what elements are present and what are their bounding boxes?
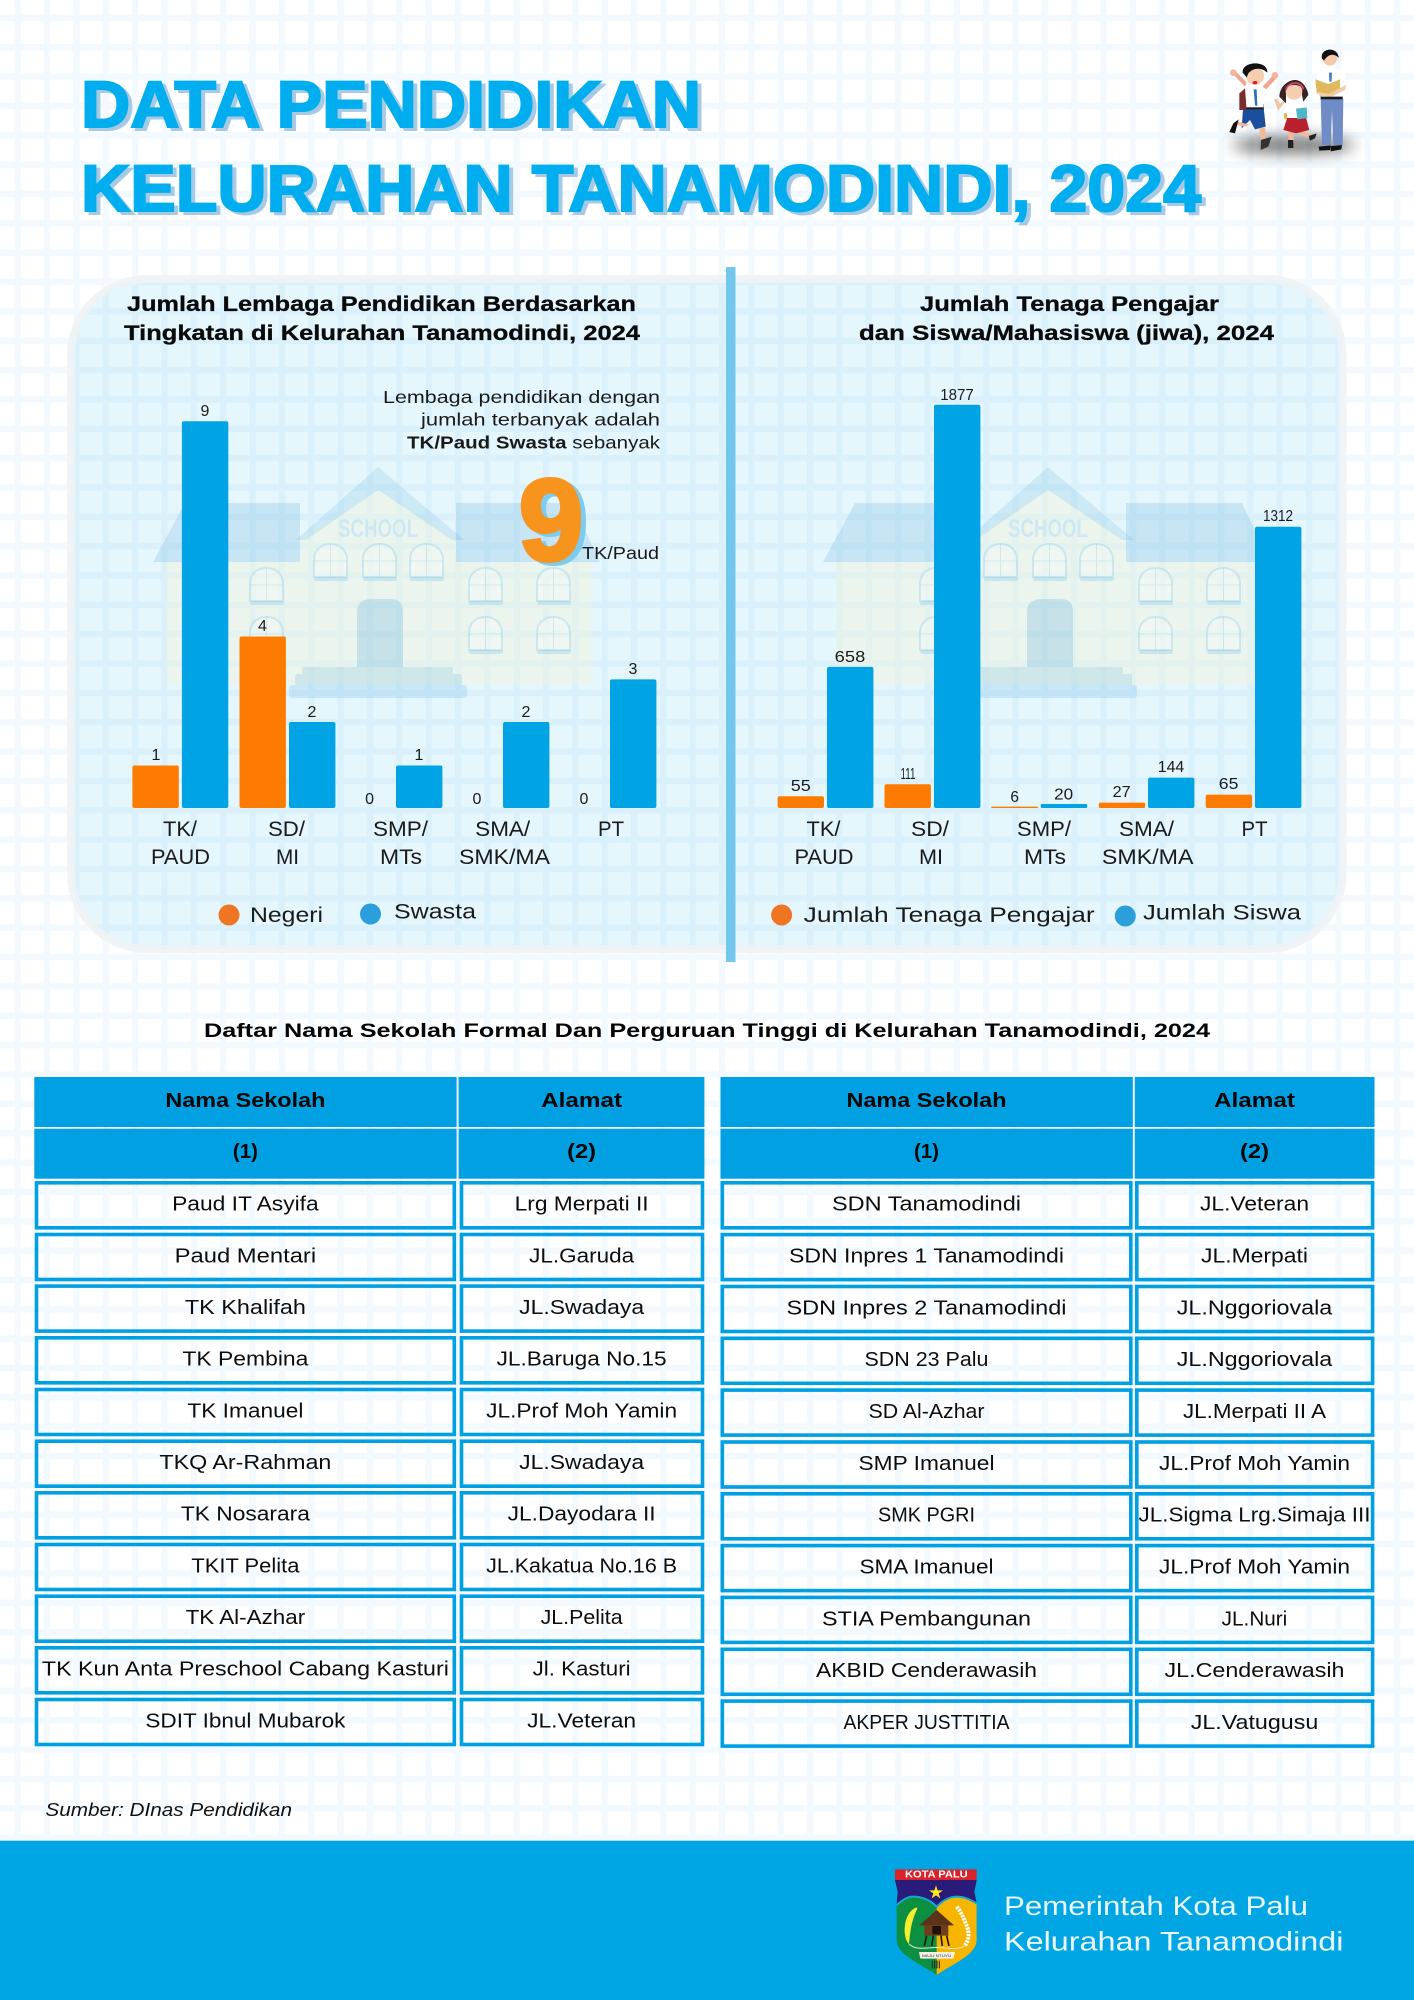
bar chart: tenaga pengajar dan siswa: 1312 (1263, 508, 1293, 525)
row: SD Al-Azhar (722, 1390, 1373, 1435)
row: SDIT Ibnul Mubarok (36, 1700, 702, 1744)
title: DATA PENDIDIKAN (81, 67, 701, 141)
row: TK Imanuel: TK Imanuel (187, 1399, 303, 1422)
watermark: school building right (823, 467, 1270, 698)
bar chart: tenaga pengajar dan siswa: 55 (791, 778, 811, 795)
bar chart: lembaga pendidikan: 3 (629, 661, 638, 678)
legend right (771, 902, 1301, 927)
row: SMA Imanuel (722, 1546, 1373, 1591)
bar chart: lembaga pendidikan: 1 (415, 747, 424, 764)
callout: most institutions (383, 387, 660, 585)
row: TK Al-Azhar: TK Al-Azhar (186, 1606, 305, 1629)
row: TKQ Ar-Rahman (36, 1441, 702, 1486)
table header left: Alamat (541, 1089, 622, 1112)
row: SDN Inpres 2 Tanamodindi: SDN Inpres 2 Tanamodindi (786, 1296, 1066, 1319)
row: SDN Tanamodindi (722, 1183, 1373, 1228)
row: SDIT Ibnul Mubarok: JL.Veteran (527, 1709, 636, 1732)
bar chart: tenaga pengajar dan siswa: 658 (835, 649, 865, 666)
bar chart: lembaga pendidikan: MI (276, 846, 299, 869)
row: TK Al-Azhar: JL.Pelita (541, 1606, 623, 1629)
row: TK Imanuel (36, 1390, 702, 1434)
legend right: Jumlah Siswa (1143, 902, 1301, 924)
table: left (34, 1077, 704, 1744)
row: Paud IT Asyifa: Paud IT Asyifa (172, 1193, 319, 1216)
bar chart: lembaga pendidikan: 1 (152, 747, 161, 764)
bar chart: tenaga pengajar dan siswa: 111 (900, 766, 916, 783)
bar chart: tenaga pengajar dan siswa: SMA/ (1119, 818, 1174, 841)
table header right: (2) (1240, 1140, 1269, 1163)
row: TKIT Pelita: JL.Kakatua No.16 B (486, 1554, 677, 1577)
bar chart: tenaga pengajar dan siswa: MTs (1024, 846, 1066, 869)
bar chart: lembaga pendidikan: 2 (308, 704, 317, 721)
row: AKBID Cenderawasih: JL.Cenderawasih (1164, 1659, 1344, 1682)
watermark: school building left: SCHOOL (338, 515, 418, 543)
icon: Kota Palu emblem (895, 1869, 977, 1975)
row: TKIT Pelita (36, 1544, 702, 1590)
row: TK Pembina: TK Pembina (182, 1348, 309, 1371)
row: Paud IT Asyifa (36, 1183, 702, 1228)
footer band (0, 1841, 1414, 2000)
row: Paud Mentari (36, 1234, 702, 1280)
source note: Sumber: DInas Pendidikan (45, 1799, 292, 1820)
bar chart: tenaga pengajar dan siswa (778, 387, 1301, 869)
table header left: (2) (567, 1140, 596, 1163)
bar chart: tenaga pengajar dan siswa: SMP/ (1017, 818, 1071, 841)
row: Paud Mentari: Paud Mentari (175, 1244, 316, 1267)
legend right: Jumlah Tenaga Pengajar (804, 904, 1095, 927)
callout: most institutions: Lembaga pendidikan dengan (383, 387, 660, 407)
bar chart: lembaga pendidikan: MTs (380, 846, 422, 869)
table header right: Alamat (1214, 1089, 1295, 1112)
divider between charts (726, 267, 736, 962)
row: TK Imanuel: JL.Prof Moh Yamin (486, 1399, 677, 1422)
row: AKBID Cenderawasih: AKBID Cenderawasih (816, 1659, 1037, 1682)
bar chart: lembaga pendidikan: SMA/ (475, 818, 530, 841)
row: SDN Tanamodindi: SDN Tanamodindi (832, 1193, 1021, 1216)
row: TK Pembina (36, 1338, 702, 1383)
bar chart: tenaga pengajar dan siswa: SD/ (911, 818, 949, 841)
icon: Kota Palu emblem: KOTA PALU (905, 1870, 968, 1881)
row: SMP Imanuel (722, 1442, 1373, 1487)
bar chart: tenaga pengajar dan siswa: 27 (1113, 784, 1131, 801)
watermark: school building right: SCHOOL (1008, 515, 1088, 543)
table header left: (1) (233, 1140, 258, 1163)
bar chart: lembaga pendidikan: 0 (473, 791, 482, 808)
row: SDIT Ibnul Mubarok: SDIT Ibnul Mubarok (145, 1709, 346, 1732)
legend left: Negeri (250, 904, 323, 927)
row: SDN Inpres 1 Tanamodindi (722, 1235, 1373, 1280)
table: right (720, 1077, 1374, 1746)
row: TK Kun Anta Preschool (36, 1648, 702, 1693)
row: Paud Mentari: JL.Garuda (529, 1244, 635, 1267)
row: SMP Imanuel: SMP Imanuel (858, 1452, 994, 1475)
illustration: students and teacher (1229, 50, 1355, 154)
row: TK Nosarara: TK Nosarara (181, 1503, 311, 1526)
row: TK Kun Anta Preschool: TK Kun Anta Preschool Cabang Kasturi (42, 1658, 449, 1681)
title: KELURAHAN TANAMODINDI, 2024 (81, 151, 1201, 225)
row: SDN Inpres 1 Tanamodindi: SDN Inpres 1 Tanamodindi (789, 1244, 1064, 1268)
bar chart: lembaga pendidikan: SMP/ (373, 818, 428, 841)
watermark: school building left (153, 467, 600, 698)
row: SDN Tanamodindi: JL.Veteran (1200, 1193, 1309, 1216)
bar chart: tenaga pengajar dan siswa: MI (919, 846, 943, 869)
row: AKPER JUSTTITIA (722, 1701, 1373, 1746)
bar chart: lembaga pendidikan: PT (598, 818, 624, 841)
callout: most institutions: jumlah terbanyak adalah (420, 409, 660, 429)
chart title right: dan Siswa/Mahasiswa (jiwa), 2024 (859, 321, 1274, 345)
callout: most institutions: TK/Paud Swasta sebanyak (407, 433, 660, 453)
table header left (34, 1077, 704, 1179)
table heading: Daftar Nama Sekolah Formal Dan Perguruan Tinggi di Kelurahan Tanamodindi, 2024 (204, 1020, 1210, 1042)
table header right: Nama Sekolah (846, 1089, 1006, 1112)
row: SDN Inpres 2 Tanamodindi: JL.Nggoriovala (1177, 1296, 1333, 1319)
row: Paud IT Asyifa: Lrg Merpati II (515, 1193, 649, 1216)
row: TK Pembina: JL.Baruga No.15 (497, 1348, 667, 1371)
bar chart: tenaga pengajar dan siswa: 20 (1054, 786, 1073, 804)
row: STIA Pembangunan: JL.Nuri (1222, 1607, 1287, 1630)
row: TK Al-Azhar (36, 1596, 702, 1641)
bar chart: lembaga pendidikan: 2 (522, 704, 531, 721)
callout: most institutions: TK/Paud (582, 543, 659, 563)
bar chart: lembaga pendidikan: 0 (580, 791, 589, 808)
row: SDN Inpres 1 Tanamodindi: JL.Merpati (1201, 1244, 1308, 1268)
chart title left: Jumlah Lembaga Pendidikan Berdasarkan (127, 292, 636, 316)
row: SDN Inpres 2 Tanamodindi (722, 1286, 1373, 1332)
legend left: Swasta (394, 900, 476, 924)
bar chart: lembaga pendidikan: 9 (201, 403, 210, 420)
panel: chart background (71, 279, 1342, 949)
row: SMA Imanuel: SMA Imanuel (860, 1556, 994, 1578)
table header right: (1) (914, 1140, 939, 1163)
footer text: Pemerintah Kota Palu (1004, 1891, 1308, 1921)
bar chart: tenaga pengajar dan siswa: PT (1242, 818, 1268, 841)
row: TKQ Ar-Rahman: JL.Swadaya (519, 1451, 645, 1474)
bar chart: lembaga pendidikan: 0 (365, 791, 374, 808)
table header right (720, 1077, 1374, 1179)
row: SDN 23 Palu: JL.Nggoriovala (1177, 1348, 1333, 1371)
row: SMA Imanuel: JL.Prof Moh Yamin (1159, 1556, 1350, 1578)
bar chart: tenaga pengajar dan siswa: 65 (1219, 776, 1239, 793)
row: SD Al-Azhar: SD Al-Azhar (868, 1400, 985, 1423)
row: SMK PGRI: SMK PGRI (878, 1504, 975, 1527)
table header left: Nama Sekolah (165, 1089, 325, 1112)
bar chart: lembaga pendidikan: SD/ (268, 818, 305, 841)
chart title right (859, 292, 1274, 345)
row: TK Kun Anta Preschool: Jl. Kasturi (533, 1658, 631, 1681)
bar chart: tenaga pengajar dan siswa: 1877 (940, 387, 974, 404)
bar chart: lembaga pendidikan (132, 403, 656, 869)
row: TK Khalifah: TK Khalifah (185, 1296, 306, 1319)
bar chart: tenaga pengajar dan siswa: 144 (1158, 759, 1184, 776)
big number 9: 9 (519, 455, 583, 585)
footer text (1004, 1891, 1344, 1957)
bar chart: lembaga pendidikan: TK/ (163, 818, 197, 841)
bar chart: lembaga pendidikan: PAUD (151, 846, 210, 869)
legend left (218, 900, 476, 927)
bar chart: tenaga pengajar dan siswa: 6 (1010, 789, 1019, 806)
row: TKQ Ar-Rahman: TKQ Ar-Rahman (159, 1451, 331, 1474)
bar chart: lembaga pendidikan: 4 (258, 618, 267, 635)
row: SDN 23 Palu: SDN 23 Palu (864, 1348, 988, 1371)
bar chart: tenaga pengajar dan siswa: TK/ (806, 818, 841, 841)
row: STIA Pembangunan: STIA Pembangunan (822, 1607, 1031, 1630)
row: SD Al-Azhar: JL.Merpati II A (1183, 1400, 1326, 1423)
row: SMK PGRI: JL.Sigma Lrg.Simaja III (1138, 1504, 1370, 1527)
bar chart: tenaga pengajar dan siswa: SMK/MA (1102, 846, 1193, 869)
icon: Kota Palu emblem: MAJU NTUYU (922, 1954, 952, 1958)
row: TK Khalifah (36, 1286, 702, 1331)
row: TKIT Pelita: TKIT Pelita (191, 1554, 300, 1577)
row: STIA Pembangunan (722, 1597, 1373, 1642)
bar chart: tenaga pengajar dan siswa: PAUD (794, 846, 854, 869)
bar chart: lembaga pendidikan: SMK/MA (459, 846, 550, 869)
row: AKPER JUSTTITIA: AKPER JUSTTITIA (844, 1711, 1010, 1734)
row: AKBID Cenderawasih (722, 1649, 1373, 1694)
row: SMP Imanuel: JL.Prof Moh Yamin (1159, 1452, 1350, 1475)
row: TK Khalifah: JL.Swadaya (519, 1296, 645, 1319)
row: TK Nosarara (36, 1493, 702, 1538)
title (81, 67, 1201, 225)
row: AKPER JUSTTITIA: JL.Vatugusu (1191, 1711, 1318, 1734)
chart title right: Jumlah Tenaga Pengajar (920, 292, 1220, 316)
row: SDN 23 Palu (722, 1338, 1373, 1383)
chart title left: Tingkatan di Kelurahan Tanamodindi, 2024 (124, 321, 640, 345)
chart title left (124, 292, 640, 345)
footer text: Kelurahan Tanamodindi (1004, 1927, 1344, 1957)
row: SMK PGRI (722, 1494, 1373, 1539)
row: TK Nosarara: JL.Dayodara II (508, 1503, 656, 1526)
